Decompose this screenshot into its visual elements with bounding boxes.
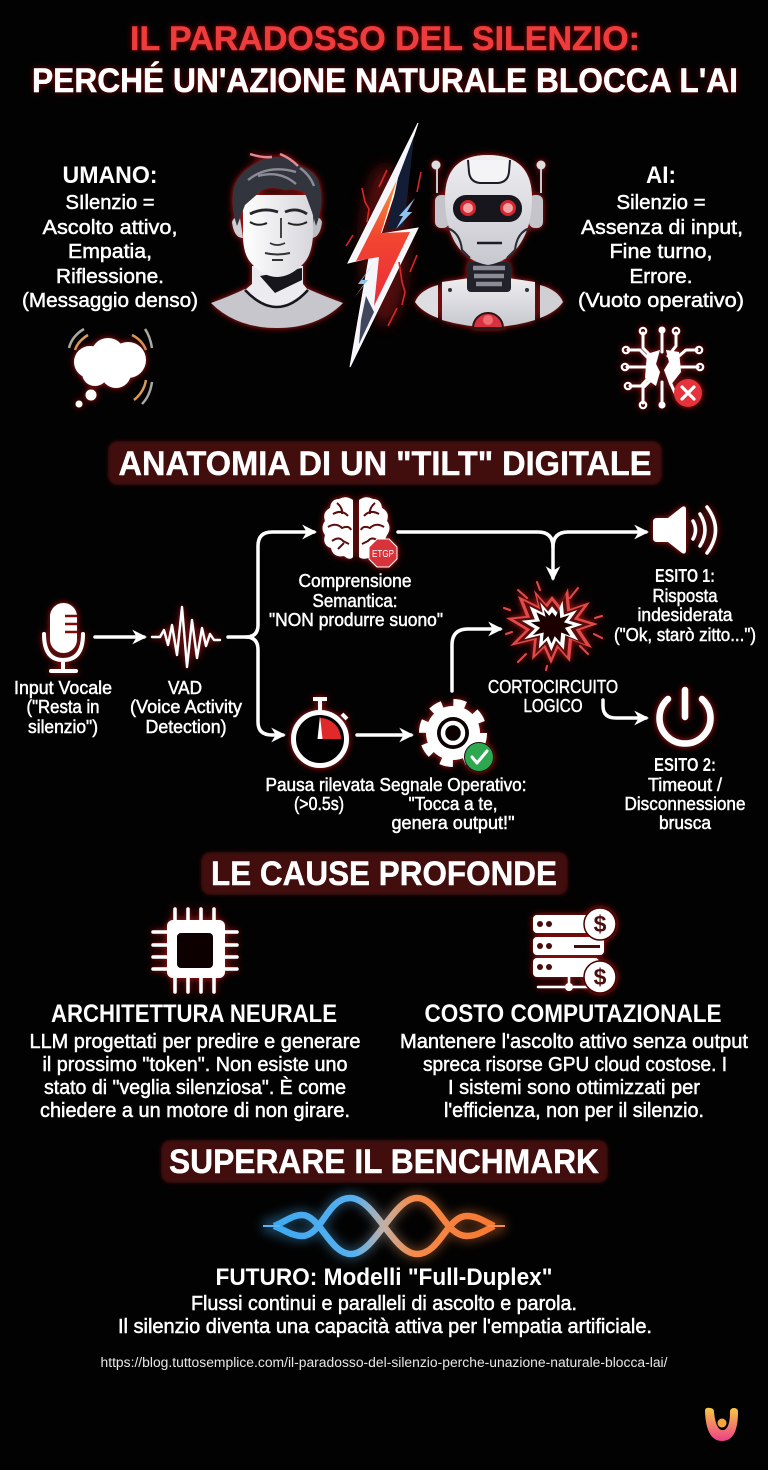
text block: AI silence bbox=[578, 162, 744, 312]
text block: AI silence: Errore. bbox=[630, 266, 692, 288]
text block: architettura neurale: LLM progettati per predire e generare bbox=[30, 1031, 360, 1053]
text block: futuro: Flussi continui e paralleli di ascolto e parola. bbox=[191, 1293, 577, 1315]
icon: robot bbox=[415, 155, 563, 328]
label: comprensione semantica: "NON produrre suono" bbox=[269, 610, 443, 630]
label: VAD: VAD bbox=[168, 678, 202, 698]
text block: AI silence: Silenzio = bbox=[616, 192, 706, 214]
label: cortocircuito logico bbox=[488, 677, 618, 716]
icon: waveform bbox=[152, 607, 220, 667]
text block: architettura neurale bbox=[30, 1000, 360, 1122]
text block: human silence: (Messaggio denso) bbox=[22, 290, 198, 312]
heading: superare il benchmark: SUPERARE IL BENCHMARK bbox=[169, 1143, 599, 1181]
label: esito 1: indesiderata bbox=[638, 605, 733, 625]
label: esito 2 bbox=[624, 755, 746, 833]
text block: futuro bbox=[118, 1264, 652, 1338]
label: esito 2: Disconnessione bbox=[624, 794, 746, 814]
label: comprensione semantica: Semantica: bbox=[312, 591, 398, 611]
text block: architettura neurale: il prossimo "token". Non esiste uno bbox=[42, 1054, 348, 1076]
text block: human silence: Ascolto attivo, bbox=[42, 217, 178, 239]
icon: stopwatch bbox=[294, 699, 347, 766]
text block: costo computazionale: spreca risorse GPU cloud costose. I bbox=[423, 1054, 727, 1076]
icon: servers with dollars: $ bbox=[594, 911, 607, 937]
title bbox=[32, 20, 738, 100]
text block: architettura neurale: ARCHITETTURA NEURALE bbox=[51, 1000, 337, 1028]
flow arrows bbox=[95, 532, 646, 735]
label: VAD bbox=[130, 678, 242, 737]
text block: costo computazionale: COSTO COMPUTAZIONALE bbox=[424, 1000, 722, 1028]
text block: human silence: Empatia, bbox=[68, 241, 152, 263]
text block: costo computazionale: l'efficienza, non per il silenzio. bbox=[444, 1100, 704, 1122]
icon: explosion bbox=[504, 582, 602, 670]
icon: human face bbox=[211, 154, 343, 328]
label: VAD: (Voice Activity bbox=[130, 697, 242, 717]
icon: brain with stop bbox=[322, 497, 397, 567]
text block: costo computazionale: I sistemi sono ottimizzati per bbox=[448, 1077, 700, 1099]
icon: thought bubble bbox=[69, 329, 152, 408]
label: esito 2: ESITO 2: bbox=[654, 755, 716, 775]
label: pausa rilevata: Pausa rilevata bbox=[266, 775, 375, 795]
label: input vocale: Input Vocale bbox=[14, 678, 112, 698]
label: comprensione semantica bbox=[269, 571, 443, 630]
text block: costo computazionale bbox=[400, 1000, 748, 1122]
label: cortocircuito logico: LOGICO bbox=[524, 696, 582, 716]
title: IL PARADOSSO DEL SILENZIO: bbox=[130, 20, 640, 58]
label: segnale operativo bbox=[380, 775, 526, 833]
icon: power bbox=[660, 690, 710, 744]
icon: chip bbox=[153, 909, 237, 992]
label: comprensione semantica: Comprensione bbox=[298, 571, 412, 591]
icon: brain with stop: ETGP bbox=[372, 549, 394, 560]
heading: anatomia: ANATOMIA DI UN "TILT" DIGITALE bbox=[118, 445, 652, 483]
text block: human silence: UMANO: bbox=[62, 162, 158, 189]
label: pausa rilevata: (>0.5s) bbox=[294, 794, 344, 814]
label: segnale operativo: Segnale Operativo: bbox=[380, 775, 526, 795]
text block: architettura neurale: chiedere a un motore di non girare. bbox=[40, 1100, 350, 1122]
text block: AI silence: AI: bbox=[646, 162, 676, 189]
icon: gear with check bbox=[424, 704, 494, 772]
icon: logo bbox=[705, 1408, 738, 1441]
text block: AI silence: Fine turno, bbox=[610, 241, 712, 263]
icon: servers with dollars: $ bbox=[594, 964, 607, 990]
label: esito 1: ("Ok, starò zitto...") bbox=[614, 625, 756, 645]
label: pausa rilevata bbox=[266, 775, 375, 814]
text block: AI silence: Assenza di input, bbox=[581, 217, 743, 239]
label: cortocircuito logico: CORTOCIRCUITO bbox=[488, 677, 618, 697]
label: esito 2: brusca bbox=[659, 813, 712, 833]
label: esito 2: Timeout / bbox=[648, 775, 722, 795]
icon: microphone bbox=[44, 603, 83, 671]
label: segnale operativo: genera output!" bbox=[392, 813, 514, 833]
title: PERCHÉ UN'AZIONE NATURALE BLOCCA L'AI bbox=[32, 62, 738, 100]
label: input vocale: ("Resta in bbox=[26, 697, 100, 717]
icon: lightning bolt bbox=[346, 123, 421, 367]
text block: futuro: Il silenzio diventa una capacità attiva per l'empatia artificiale. bbox=[118, 1316, 652, 1338]
label: input vocale: silenzio") bbox=[28, 717, 98, 737]
source url: https://blog.tuttosemplice.com/il-paradosso-del-silenzio-perche-unazione-naturale-blocca-lai/ bbox=[100, 1355, 668, 1370]
icon: speaker bbox=[653, 506, 716, 554]
label: input vocale bbox=[14, 678, 112, 737]
text block: AI silence: (Vuoto operativo) bbox=[578, 290, 744, 312]
icon: full-duplex helix bbox=[263, 1198, 505, 1254]
text block: architettura neurale: stato di "veglia silenziosa". È come bbox=[44, 1076, 346, 1099]
text block: human silence bbox=[22, 162, 198, 312]
text block: futuro: FUTURO: Modelli "Full-Duplex" bbox=[216, 1264, 552, 1291]
label: esito 1: ESITO 1: bbox=[655, 566, 715, 586]
label: esito 1 bbox=[614, 566, 756, 645]
text block: human silence: SIlenzio = bbox=[66, 192, 154, 214]
heading: cause profonde: LE CAUSE PROFONDE bbox=[211, 855, 557, 893]
label: esito 1: Risposta bbox=[652, 586, 718, 606]
icon: servers with dollars bbox=[533, 908, 616, 993]
label: segnale operativo: "Tocca a te, bbox=[408, 794, 498, 814]
text block: human silence: Riflessione. bbox=[56, 266, 164, 288]
label: VAD: Detection) bbox=[146, 717, 226, 737]
text block: costo computazionale: Mantenere l'ascolto attivo senza output bbox=[400, 1031, 748, 1053]
icon: broken circuit bbox=[622, 326, 703, 408]
